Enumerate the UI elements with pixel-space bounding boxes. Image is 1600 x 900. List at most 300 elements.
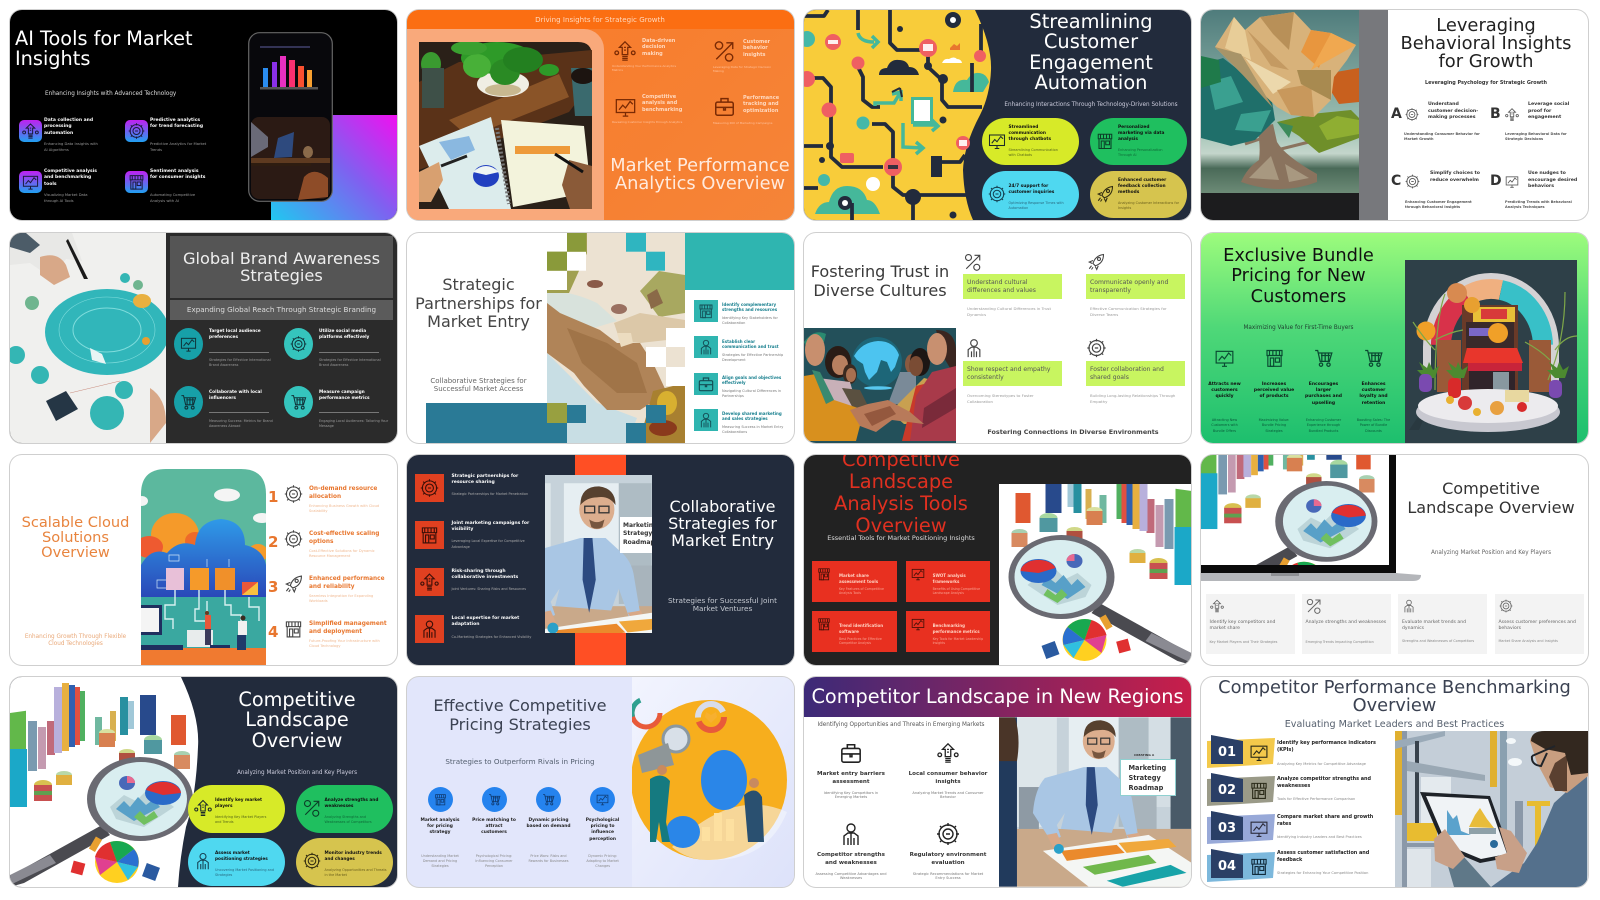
item A (1391, 102, 1481, 142)
highlight box: Foster collaboration and (1090, 366, 1164, 373)
title (652, 499, 793, 549)
badge (1207, 735, 1275, 768)
item: regulatory environment (900, 822, 996, 882)
label: Simplified management (309, 621, 387, 627)
subtitle: Identifying Opportunities and Threats in Emerging Markets (817, 722, 985, 728)
description: Weaknesses of Competitors (324, 820, 372, 824)
description: Analyzing Key Metrics for Competitive Advantage (1277, 762, 1366, 766)
description: and Trends (215, 820, 234, 824)
subtitle: Essential Tools for Market Positioning Insights (827, 534, 975, 542)
description: Dynamic Pricing: (588, 854, 617, 858)
label (839, 623, 883, 635)
description (467, 854, 521, 870)
description (900, 790, 996, 800)
card: strengths and weaknesses (1302, 594, 1391, 654)
label (1498, 620, 1576, 632)
panel: Competitive Landscape Overview (dark) (10, 677, 397, 887)
photo: man with roadmap (545, 475, 652, 633)
description: Market Growth (1404, 136, 1433, 140)
label: purchases and (1305, 394, 1342, 399)
title: Landscape (849, 470, 953, 493)
label: feedback collection (1118, 184, 1166, 189)
item: sentiment analysis (125, 168, 206, 203)
title: Competitive (238, 688, 356, 711)
label: dynamics (1402, 626, 1424, 630)
panel: Leveraging Behavioral Insights for Growth (1201, 10, 1588, 220)
label (467, 818, 521, 837)
description (324, 814, 372, 825)
label: adaptation (452, 622, 479, 627)
icon (694, 373, 718, 395)
label: loyalty and (1359, 394, 1388, 399)
description: Enhancing Customer (1306, 418, 1341, 422)
pale photo panel (407, 29, 604, 220)
label: customers (1211, 388, 1238, 393)
subtitle: Strategies to Outperform Rivals in Pricing (445, 757, 595, 766)
subtitle: Analyzing Market Position and Key Players (237, 770, 357, 776)
description: Enhancing Personalization (1118, 148, 1163, 152)
label: players (215, 804, 233, 809)
item: risk-sharing (415, 568, 540, 596)
description: Automation (1008, 206, 1028, 210)
description: Predicting Trends with Behavioral (1505, 200, 1572, 204)
title (1029, 10, 1153, 94)
label: resource sharing (452, 480, 495, 485)
label: and sales strategies (722, 416, 768, 420)
photo: engineer with tablet (1395, 731, 1588, 887)
label (1528, 171, 1577, 191)
label: rates (1277, 821, 1291, 827)
icon (1361, 348, 1386, 368)
icon (1249, 743, 1269, 762)
description: Strategies for Effective International (209, 358, 271, 362)
label (933, 623, 980, 635)
label: Compare market share and growth (1277, 814, 1373, 820)
label: Regulatory environment (910, 852, 986, 858)
description: Resource Management (309, 554, 350, 558)
label: optimization (743, 108, 778, 114)
label: benchmarking (642, 107, 682, 113)
icon (988, 134, 1006, 149)
label: Market entry barriers (817, 771, 885, 777)
description: Partnerships (722, 394, 744, 398)
label: Dynamic pricing (528, 818, 568, 823)
icon (1306, 598, 1322, 614)
description: Revealing Customer Insights through Analytics (612, 120, 682, 124)
illustration: yellow circuit network (804, 10, 992, 220)
label: Assess customer preferences and (1498, 620, 1576, 624)
description (722, 352, 783, 362)
number: 01 (1218, 745, 1236, 760)
description: Bundle Pricing (1262, 423, 1286, 427)
item: communicate openly (1086, 253, 1186, 319)
subtitle: Maximizing Value for First-Time Buyers (1244, 325, 1354, 331)
description: Overcoming Stereotypes to Foster (967, 393, 1034, 398)
sign on photo: Roadmap (1128, 784, 1163, 792)
pill: strengths and weaknesses (296, 785, 393, 832)
label: tracking and (743, 101, 779, 107)
description: Weaknesses (840, 876, 862, 880)
panel: Competitive Landscape Analysis Tools Overview (804, 455, 1191, 665)
icon (194, 799, 212, 817)
icon (1086, 253, 1106, 271)
panel: Competitor Performance Benchmarking Overview (1201, 677, 1588, 887)
description: Engaging Local Audiences: Tailoring Your (319, 418, 388, 422)
label (319, 329, 369, 341)
subtitle (652, 596, 793, 614)
description: Power of Bundle (1360, 423, 1387, 427)
description: through AI Tools (44, 199, 74, 203)
photo: magnifier over charts (10, 677, 198, 887)
icon (415, 474, 444, 502)
description: Market Share Analysis and Insights (1498, 639, 1558, 643)
description: Automating Competitive (150, 193, 195, 197)
label: Enhanced customer (1118, 178, 1166, 183)
description: Insights (1118, 206, 1131, 210)
label (150, 168, 206, 180)
label: and deployment (309, 629, 362, 635)
label: Competitive (642, 94, 676, 100)
label: Strategic partnerships for (452, 474, 518, 479)
title: Strategies for (668, 514, 777, 533)
label: and changes (324, 857, 355, 862)
description (1008, 200, 1064, 211)
label: Measure campaign (319, 390, 365, 395)
title: Overview (41, 544, 110, 561)
description: Analyzing Opportunities and Threats (324, 868, 387, 872)
title: Behavioral Insights (1400, 33, 1572, 54)
panel: Market Performance Analytics Overview (407, 10, 794, 220)
label: software (839, 629, 859, 634)
subtitle (10, 634, 141, 648)
title: Pricing Strategies (449, 715, 591, 734)
title (804, 449, 998, 537)
title (610, 155, 790, 194)
panel: Exclusive Bundle Pricing for New Customers (1201, 233, 1588, 443)
label: Market share (839, 573, 869, 578)
label: encourage desired (1528, 178, 1577, 183)
description: Strategies (1265, 429, 1283, 433)
icon (839, 822, 863, 846)
label: larger (1316, 388, 1331, 393)
label (1118, 124, 1164, 142)
label: Trend identification (839, 623, 883, 628)
panel: Competitive Landscape Overview (laptop) (1201, 455, 1588, 665)
description: Bundled Products (1309, 429, 1338, 433)
label: influencers (209, 396, 236, 401)
description: Strategies for Effective Partnership (722, 352, 783, 356)
sign on photo: Strategy (623, 530, 652, 537)
label: Target local audience (209, 329, 261, 334)
description: Metrics (612, 68, 623, 72)
subtitle: Successful Market Access (434, 385, 523, 393)
description: Optimizing Response Times with (1008, 200, 1064, 204)
header band with title: Competitor Landscape in New Regions (811, 685, 1184, 708)
divider (319, 412, 379, 413)
label (743, 39, 770, 58)
item: consumer behavior (900, 742, 996, 802)
icon (1249, 819, 1269, 838)
header band with title (804, 677, 1191, 717)
label: through chatbots (1008, 137, 1051, 142)
title: Market Entry (671, 531, 774, 550)
icon (415, 568, 444, 596)
title: Competitive (1442, 479, 1540, 498)
label: retention (1362, 401, 1385, 406)
description (612, 64, 676, 72)
subtitle: Enhancing Interactions Through Technology-Driven Solutions (1004, 102, 1178, 108)
icon (1210, 598, 1224, 614)
item 2 (268, 530, 393, 560)
label: Increases (1262, 382, 1286, 387)
label (150, 118, 203, 129)
description: Experience through (1307, 423, 1340, 427)
label: influence (591, 830, 614, 835)
label: quickly (1215, 394, 1234, 399)
badge (1207, 811, 1275, 844)
description (967, 306, 1051, 318)
description (1090, 306, 1167, 318)
icon (1086, 338, 1107, 358)
label: Benchmarking (933, 623, 965, 628)
label: insights (743, 52, 765, 58)
title (197, 690, 397, 751)
description: Making (713, 69, 724, 73)
description: Strategic Partnerships for Market Penetration (452, 492, 528, 496)
description (722, 424, 783, 436)
item 4 (268, 620, 393, 650)
label: behaviors (1498, 626, 1521, 630)
icon (284, 328, 313, 360)
description: Analyzing Market Trends and Consumer (912, 790, 984, 794)
panel: Competitor Landscape in New Regions (804, 677, 1191, 887)
description: Strategies (431, 864, 449, 868)
title: Partnerships for (415, 294, 542, 313)
item 03 (1207, 811, 1391, 844)
label: Streamlined (1008, 125, 1038, 130)
icon (815, 617, 833, 631)
label: platforms effectively (319, 335, 369, 340)
item: market analysis (413, 787, 467, 873)
description: Strategies for Enhancing Your Competitive Position (1277, 870, 1368, 874)
label: decision (642, 44, 665, 50)
label (900, 851, 996, 867)
description: Strategic Decisions (1505, 136, 1543, 140)
card: benchmarking (906, 611, 990, 652)
description: Analyzing Strengths and (324, 814, 366, 818)
description (309, 504, 379, 514)
icon (1505, 106, 1519, 123)
description: Customers with (1211, 423, 1238, 427)
item: performance tracking (713, 95, 779, 125)
icon (838, 742, 864, 764)
label: Simplify choices to (1430, 171, 1480, 176)
label: insights (935, 779, 961, 785)
description (324, 868, 387, 878)
photo: people around glowing globe (804, 328, 956, 443)
description: Co-Marketing Strategies for Enhanced Visibility (452, 635, 531, 639)
title: AI Tools for Market (15, 27, 193, 50)
description (309, 638, 380, 648)
number: 04 (1218, 859, 1236, 874)
label (44, 118, 93, 136)
label: and weaknesses (825, 860, 877, 866)
description: Analysis with AI (150, 199, 179, 203)
label (576, 818, 630, 843)
label: behavior (743, 45, 768, 51)
description: Key Market Players and Their Strategies (1210, 640, 1277, 644)
description (44, 193, 88, 203)
label (1250, 382, 1298, 401)
icon (125, 120, 148, 142)
item: dynamic pricing (522, 787, 576, 873)
label (309, 485, 377, 501)
item: cultural differences (962, 253, 1062, 319)
highlight box (1086, 274, 1185, 299)
label (309, 575, 385, 591)
title: Market Performance (610, 155, 790, 176)
icon (174, 386, 203, 418)
subtitle box: Expanding Global Reach Through Strategic Branding (187, 305, 376, 314)
label (1277, 814, 1373, 827)
highlight box: Understand cultural (967, 279, 1028, 286)
title: Competitor Performance Benchmarking (1218, 677, 1571, 698)
subtitle: Strategies for Successful Joint (668, 596, 777, 604)
label (1528, 102, 1569, 122)
label: attract (486, 824, 502, 829)
item 01 (1207, 735, 1391, 768)
title: Leveraging (1436, 14, 1536, 36)
description: Building Long-lasting Relationships Through (1090, 393, 1175, 398)
item: competitor strengths (804, 822, 898, 882)
description: Predictive Analytics for Market (150, 142, 206, 146)
label: Analyze competitor strengths and (1277, 776, 1371, 782)
description (1201, 418, 1248, 434)
subtitle: Market Ventures (693, 604, 752, 613)
label (1201, 382, 1248, 401)
label (1349, 382, 1398, 407)
label (1118, 178, 1166, 196)
title: Fostering Trust in (811, 262, 949, 281)
description: Psychological Pricing: (476, 854, 512, 858)
label: Predictive analytics (150, 118, 200, 123)
divider (209, 352, 269, 353)
icon (1405, 106, 1419, 123)
label: evaluation (931, 860, 965, 866)
illustration: analysts with telescope (632, 677, 794, 887)
label: assessment tools (839, 579, 878, 584)
item: competitive analysis (612, 94, 682, 124)
label: and benchmarking (44, 175, 91, 180)
label: Analyze strengths and (324, 798, 378, 803)
label: weaknesses (324, 804, 353, 809)
label: perceived value (1254, 388, 1294, 393)
description: Visualizing Market Data (44, 193, 88, 197)
icon (1249, 857, 1269, 876)
description: Analysis Tools (839, 591, 861, 595)
description: Analyzing Customer Interactions for (1118, 200, 1179, 204)
label: perception (589, 837, 616, 842)
title box: Global Brand Awareness (183, 249, 380, 268)
description: Leveraging Data for Strategic Decision (713, 65, 771, 69)
number: 02 (1218, 783, 1236, 798)
label: Personalized (1118, 125, 1149, 130)
letter: B (1490, 106, 1501, 122)
label: customers (481, 830, 507, 835)
description: Identifying Key Market Players (215, 814, 266, 818)
description: Effective Communication Strategies for (1090, 306, 1167, 311)
label: Develop shared marketing (722, 410, 782, 416)
description: Demand and Pricing (423, 859, 457, 863)
icon (1498, 598, 1512, 614)
icon (303, 852, 321, 870)
description: Competitor Analysis (839, 641, 871, 645)
label: Competitor strengths (817, 852, 885, 858)
label (642, 94, 682, 113)
label: upselling (1312, 401, 1335, 406)
icon (303, 799, 321, 817)
footer: Fostering Connections in Diverse Environments (987, 428, 1159, 436)
description: Benefits of Using Competitive (933, 586, 980, 590)
title: Analysis Tools (834, 492, 968, 515)
label (900, 770, 996, 786)
icon (284, 619, 303, 639)
label (933, 573, 966, 585)
photo: smartphone with neon chart (248, 32, 333, 202)
label: options (309, 539, 333, 545)
description: in the Market (324, 873, 347, 877)
title: Automation (1035, 71, 1147, 94)
description (1118, 200, 1179, 211)
description: Key Tools for Market Leadership (933, 636, 983, 640)
label: allocation (309, 494, 341, 500)
description (1299, 418, 1348, 434)
description: Analysis Techniques (1505, 205, 1545, 209)
label (522, 818, 576, 830)
label: frameworks (933, 579, 959, 584)
card: market share (812, 561, 897, 602)
icon (1098, 134, 1112, 149)
label (324, 851, 382, 863)
label: analysis and (642, 100, 677, 106)
label (722, 374, 781, 384)
description: Perception (485, 864, 503, 868)
label (1008, 124, 1051, 142)
teal corner block (685, 233, 794, 290)
title (10, 514, 141, 560)
title: Overview (252, 729, 342, 752)
item: target local audience (174, 328, 274, 368)
description: Brand Awareness (209, 362, 238, 366)
icon (19, 171, 42, 193)
label: marketing via data (1118, 131, 1164, 136)
label: pricing to (591, 824, 615, 829)
title: Overview (1353, 695, 1436, 716)
icon (964, 338, 984, 358)
description: Attracting New (1212, 418, 1237, 422)
description: Landscape Analysis (933, 591, 964, 595)
description: Tools for Effective Performance Comparison (1277, 796, 1355, 800)
description: Best Practices for Effective (839, 636, 882, 640)
description: Changes (595, 864, 610, 868)
label: Data-driven (642, 38, 675, 44)
label (804, 851, 898, 867)
description: Discounts (1365, 429, 1382, 433)
title (1386, 16, 1586, 72)
icon (909, 567, 927, 581)
subtitle: Cloud Technologies (48, 641, 103, 647)
label: Data collection and (44, 118, 93, 123)
